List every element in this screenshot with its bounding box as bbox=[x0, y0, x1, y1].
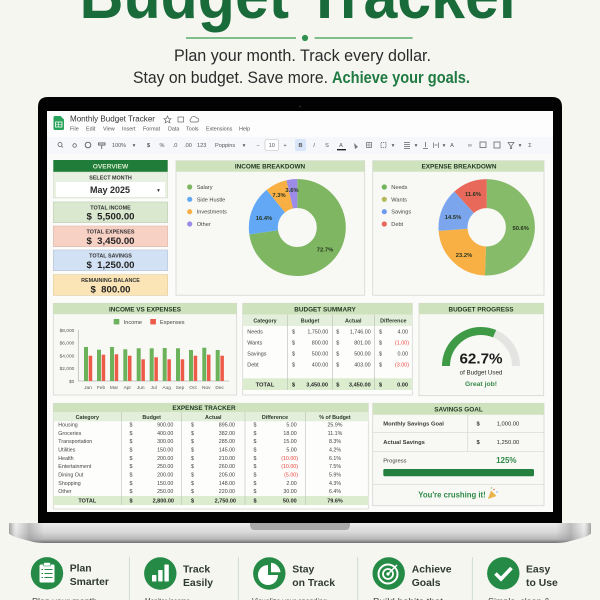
income breakdown heading bbox=[176, 161, 365, 172]
expense tracker rows: $ bbox=[130, 464, 132, 470]
expense tracker rows: $ bbox=[254, 464, 256, 470]
budget summary total row: $ bbox=[379, 382, 383, 388]
expense donut chart bbox=[445, 192, 529, 261]
expense tracker column headers: Difference bbox=[262, 415, 288, 421]
feature heading bbox=[70, 564, 109, 588]
laptop bezel bbox=[38, 97, 562, 523]
income legend: Other bbox=[197, 222, 211, 228]
income legend: Side Hustle bbox=[197, 197, 225, 203]
budget summary rows: Wants bbox=[247, 340, 263, 346]
menu bar: Edit bbox=[86, 126, 96, 132]
budget summary rows: $ bbox=[336, 329, 339, 335]
spreadsheet header bbox=[47, 111, 553, 137]
toolbar: Poppins bbox=[215, 143, 235, 149]
budget summary rows: $ bbox=[336, 351, 339, 357]
expense tracker rows: 145.00 bbox=[219, 448, 235, 454]
expense breakdown heading bbox=[373, 161, 544, 172]
bar chart bbox=[60, 328, 229, 391]
toolbar: Σ bbox=[528, 143, 532, 149]
budget summary rows: 500.00 bbox=[354, 351, 371, 357]
savings goal heading: SAVINGS GOAL bbox=[434, 406, 483, 414]
expense tracker rows: $ bbox=[130, 481, 132, 487]
budget summary rows: $ bbox=[336, 340, 339, 346]
expense donut chart: 14.5% bbox=[445, 215, 461, 221]
expense tracker rows: Groceries bbox=[58, 431, 82, 437]
budget summary rows: $ bbox=[379, 340, 382, 346]
panel: expense tracker bbox=[53, 403, 368, 509]
icon: target bbox=[372, 557, 405, 590]
icon: clipboard bbox=[31, 557, 63, 590]
budget summary column headers: Budget bbox=[301, 318, 319, 324]
budget summary rows: 0.00 bbox=[398, 351, 408, 357]
chart legend bbox=[114, 319, 185, 326]
expense tracker total row: 79.6% bbox=[327, 499, 343, 505]
expense tracker rows: Housing bbox=[58, 423, 78, 429]
laptop bbox=[9, 97, 591, 543]
expense tracker rows: 7.5% bbox=[329, 464, 341, 470]
toolbar: + bbox=[283, 143, 287, 149]
expense tracker rows: $ bbox=[130, 456, 132, 462]
toolbar: B bbox=[298, 143, 303, 149]
income vs expenses heading bbox=[53, 303, 237, 314]
icon: bar chart bbox=[144, 557, 176, 590]
toolbar bbox=[47, 137, 553, 154]
expense tracker rows: 4.2% bbox=[329, 448, 341, 454]
expense tracker rows: (10.00) bbox=[281, 464, 298, 470]
expense tracker rows: $ bbox=[191, 431, 194, 437]
budget summary rows: 1,750.00 bbox=[307, 329, 328, 335]
budget summary rows: (1.00) bbox=[395, 340, 409, 346]
budget summary column headers: Difference bbox=[380, 318, 406, 324]
expense tracker rows: 900.00 bbox=[157, 423, 173, 429]
expense tracker rows: $ bbox=[130, 489, 132, 495]
tagline: Plan your month. Track every dollar. bbox=[174, 46, 431, 65]
expense tracker rows: $ bbox=[254, 448, 256, 454]
budget summary rows: 800.00 bbox=[312, 340, 328, 346]
feature heading: Stay bbox=[292, 565, 314, 576]
expense tracker rows: 5.00 bbox=[286, 423, 297, 429]
budget summary heading bbox=[243, 303, 412, 315]
gauge value: 62.7% bbox=[459, 350, 503, 368]
budget summary rows: 403.00 bbox=[354, 362, 371, 368]
expense tracker rows: Dining Out bbox=[58, 473, 84, 479]
expense tracker column headers: Budget bbox=[142, 415, 161, 421]
feature heading bbox=[183, 565, 213, 589]
monthly savings goal row: 1,000.00 bbox=[497, 422, 519, 428]
budget summary rows: 4.00 bbox=[398, 329, 408, 335]
kpi: total expenses: TOTAL EXPENSES bbox=[87, 230, 135, 236]
overview heading: OVERVIEW bbox=[93, 164, 129, 170]
budget summary rows: Debt bbox=[247, 362, 259, 368]
icon: sheets logo bbox=[54, 116, 64, 130]
menu bar: Format bbox=[143, 126, 161, 132]
expense tracker column headers: Actual bbox=[205, 415, 222, 421]
laptop base bbox=[9, 523, 591, 543]
toolbar: A bbox=[339, 143, 343, 149]
bar chart: $0 bbox=[69, 379, 75, 385]
expense tracker total row: $ bbox=[191, 499, 194, 505]
budget summary rows: $ bbox=[379, 362, 382, 368]
monthly savings goal row: $ bbox=[476, 422, 480, 428]
toolbar: A bbox=[450, 143, 454, 149]
expense tracker rows: $ bbox=[130, 431, 132, 437]
income legend: Salary bbox=[197, 185, 213, 191]
actual savings row bbox=[383, 440, 519, 446]
toolbar: .00 bbox=[184, 143, 192, 149]
expense tracker rows: 30.00 bbox=[283, 489, 297, 495]
panel: income breakdown bbox=[176, 161, 365, 295]
expense tracker rows: 210.00 bbox=[219, 456, 235, 462]
expense tracker rows: 150.00 bbox=[157, 481, 173, 487]
feature heading: Smarter bbox=[70, 577, 109, 588]
expense tracker rows: $ bbox=[254, 489, 256, 495]
expense tracker rows: 285.00 bbox=[219, 439, 235, 445]
bar chart: Mar bbox=[110, 385, 119, 391]
expense tracker heading: EXPENSE TRACKER bbox=[172, 405, 236, 412]
toolbar: S bbox=[325, 143, 329, 149]
feature heading: to Use bbox=[526, 578, 558, 589]
expense tracker rows: Utilities bbox=[58, 448, 76, 454]
expense tracker rows: 400.00 bbox=[157, 431, 173, 437]
expense tracker rows: Entertainment bbox=[58, 464, 92, 470]
expense tracker rows: $ bbox=[191, 481, 194, 487]
menu bar: Extensions bbox=[206, 126, 233, 132]
chart legend: Expenses bbox=[160, 320, 185, 326]
toolbar: ▾ bbox=[243, 143, 246, 149]
expense tracker rows: 25.9% bbox=[327, 423, 343, 429]
expense tracker rows: (10.00) bbox=[281, 456, 298, 462]
kpi: total income: $ 5,500.00 bbox=[86, 212, 135, 222]
expense legend: Needs bbox=[391, 185, 408, 191]
feature heading: Achieve bbox=[412, 565, 452, 576]
kpi: total savings: $ 1,250.00 bbox=[86, 260, 135, 271]
expense tracker rows: 260.00 bbox=[219, 464, 235, 470]
menu bar: Tools bbox=[186, 126, 199, 132]
income donut chart: 72.7% bbox=[317, 247, 333, 253]
actual savings row: 1,250.00 bbox=[497, 440, 519, 446]
feature heading: Easy bbox=[526, 565, 550, 576]
savings progress: Progress bbox=[383, 459, 407, 465]
menu bar: View bbox=[103, 126, 115, 132]
bar chart: Dec bbox=[215, 385, 225, 391]
budget summary rows: $ bbox=[292, 329, 295, 335]
expense tracker rows: 205.00 bbox=[219, 473, 235, 479]
budget progress heading: BUDGET PROGRESS bbox=[449, 306, 514, 313]
budget summary rows: 500.00 bbox=[312, 351, 328, 357]
savings progress: 125% bbox=[496, 456, 517, 465]
feature heading bbox=[412, 565, 452, 589]
panel: income vs expenses bbox=[53, 303, 237, 395]
savings progress bbox=[383, 456, 534, 476]
kpi: remaining balance: REMAINING BALANCE bbox=[81, 278, 140, 284]
expense tracker rows: 18.00 bbox=[283, 431, 297, 437]
expense tracker rows: $ bbox=[254, 481, 256, 487]
menu bar bbox=[70, 126, 250, 132]
feature heading bbox=[292, 565, 335, 589]
feature heading: Track bbox=[183, 565, 210, 576]
actual savings row: $ bbox=[476, 440, 480, 446]
toolbar: ∞ bbox=[468, 143, 472, 149]
budget summary rows: Needs bbox=[247, 329, 263, 335]
icon: pie chart bbox=[253, 557, 286, 590]
toolbar: ▾ bbox=[133, 143, 136, 149]
budget summary total row: 3,450.00 bbox=[306, 382, 328, 388]
expense tracker rows: 148.00 bbox=[219, 481, 235, 487]
budget summary rows: 1,746.00 bbox=[350, 329, 371, 335]
expense tracker rows: $ bbox=[191, 423, 194, 429]
expense tracker rows: $ bbox=[254, 431, 256, 437]
expense tracker rows: 15.00 bbox=[283, 439, 297, 445]
toolbar: ▾ bbox=[519, 143, 522, 149]
expense tracker rows: 250.00 bbox=[157, 464, 173, 470]
panel: overview bbox=[53, 160, 168, 296]
expense legend bbox=[382, 184, 411, 228]
bar chart: Feb bbox=[97, 385, 105, 391]
expense tracker rows: 300.00 bbox=[157, 439, 173, 445]
toolbar: .0 bbox=[173, 143, 177, 149]
expense tracker rows: 150.00 bbox=[157, 448, 173, 454]
bar chart: Nov bbox=[202, 385, 211, 391]
expense tracker rows: $ bbox=[191, 439, 194, 445]
expense tracker rows: 6.4% bbox=[329, 489, 341, 495]
budget summary total row: $ bbox=[336, 382, 340, 388]
panel: expense breakdown bbox=[373, 161, 544, 295]
feature: plan smarter bbox=[31, 557, 109, 600]
income vs expenses heading: INCOME VS EXPENSES bbox=[109, 306, 182, 313]
income breakdown heading: INCOME BREAKDOWN bbox=[235, 164, 306, 171]
bar chart: $6,000 bbox=[60, 341, 75, 347]
expense breakdown heading: EXPENSE BREAKDOWN bbox=[422, 164, 497, 171]
toolbar: 100% bbox=[112, 143, 126, 149]
month selector: May 2025 bbox=[90, 185, 130, 195]
budget summary rows: $ bbox=[336, 362, 339, 368]
kpi: remaining balance: $ 800.00 bbox=[90, 284, 131, 296]
expense tracker rows: $ bbox=[191, 464, 194, 470]
expense tracker rows: $ bbox=[254, 456, 256, 462]
expense legend: Debt bbox=[391, 222, 404, 228]
expense tracker total row: $ bbox=[130, 499, 133, 505]
feature: easy to use bbox=[487, 557, 558, 600]
budget summary heading: BUDGET SUMMARY bbox=[294, 306, 357, 314]
menu bar: Insert bbox=[122, 126, 136, 132]
toolbar: ▾ bbox=[392, 143, 395, 149]
expense tracker rows: $ bbox=[254, 473, 256, 479]
expense tracker rows: 5.00 bbox=[286, 448, 297, 454]
income donut chart: 16.4% bbox=[256, 216, 272, 222]
menu bar: Data bbox=[168, 126, 179, 132]
expense tracker rows: 4.3% bbox=[329, 481, 341, 487]
expense tracker rows: $ bbox=[254, 423, 256, 429]
income donut chart: 3.6% bbox=[285, 188, 299, 194]
feature heading: Goals bbox=[412, 578, 441, 589]
expense tracker rows: $ bbox=[130, 423, 132, 429]
actual savings row: Actual Savings bbox=[383, 440, 425, 446]
expense donut chart: 23.2% bbox=[456, 253, 472, 259]
monthly savings goal row bbox=[383, 422, 519, 428]
expense tracker rows: 250.00 bbox=[157, 489, 173, 495]
bar chart: Oct bbox=[189, 385, 197, 391]
bar chart: Sep bbox=[176, 385, 185, 391]
budget summary total row: TOTAL bbox=[256, 382, 275, 388]
budget summary column headers: Category bbox=[253, 318, 277, 324]
expense tracker rows: (5.00) bbox=[284, 473, 298, 479]
budget summary rows: $ bbox=[292, 340, 295, 346]
laptop camera bbox=[299, 105, 301, 108]
expense tracker rows: 11.1% bbox=[328, 431, 343, 437]
toolbar: ▾ bbox=[443, 143, 446, 149]
panel: budget summary bbox=[243, 303, 412, 395]
expense donut chart: 11.6% bbox=[465, 192, 481, 198]
kpi: total expenses bbox=[53, 226, 168, 247]
gauge bbox=[446, 331, 516, 366]
expense tracker rows: Shopping bbox=[58, 481, 81, 487]
expense tracker rows: $ bbox=[191, 489, 194, 495]
expense tracker rows bbox=[58, 423, 343, 495]
expense tracker rows: Other bbox=[58, 489, 72, 495]
feature heading: Plan bbox=[70, 564, 92, 574]
expense tracker rows: 5.9% bbox=[329, 473, 341, 479]
budget summary column headers: Actual bbox=[345, 318, 362, 324]
budget summary total row bbox=[243, 378, 412, 390]
toolbar: 10 bbox=[269, 143, 275, 149]
expense tracker rows: $ bbox=[254, 439, 256, 445]
expense tracker column headers: % of Budget bbox=[319, 415, 351, 421]
feature: track easily bbox=[144, 557, 213, 600]
savings goal heading bbox=[373, 403, 544, 415]
budget summary rows: $ bbox=[292, 362, 295, 368]
expense tracker rows: 200.00 bbox=[157, 456, 173, 462]
toolbar: % bbox=[160, 143, 165, 149]
tagline: Stay on budget. Save more. bbox=[133, 68, 328, 87]
income donut chart bbox=[256, 188, 333, 262]
expense tracker rows: $ bbox=[191, 448, 194, 454]
expense tracker rows: 220.00 bbox=[219, 489, 235, 495]
expense tracker heading bbox=[53, 403, 368, 412]
month selector: SELECT MONTH bbox=[89, 176, 132, 182]
budget summary column headers bbox=[243, 315, 412, 326]
budget summary total row: 3,450.00 bbox=[349, 382, 371, 388]
income legend bbox=[187, 184, 227, 228]
expense tracker rows: 8.3% bbox=[329, 439, 341, 445]
budget summary rows: (3.00) bbox=[395, 362, 409, 368]
expense tracker rows: 895.00 bbox=[219, 423, 235, 429]
expense tracker rows: $ bbox=[130, 439, 132, 445]
budget summary rows: $ bbox=[292, 351, 295, 357]
kpi: total expenses: $ 3,450.00 bbox=[86, 236, 135, 247]
budget summary rows: 801.00 bbox=[354, 340, 371, 346]
toolbar: 123 bbox=[197, 143, 206, 149]
feature heading bbox=[526, 565, 558, 589]
bar chart: Jan bbox=[84, 385, 92, 391]
feature heading: on Track bbox=[292, 578, 335, 589]
gauge caption: of Budget Used bbox=[460, 370, 503, 377]
panel: budget progress bbox=[419, 303, 544, 396]
income legend: Investments bbox=[197, 210, 227, 216]
menu bar: File bbox=[70, 126, 79, 132]
bar chart: Jun bbox=[137, 385, 145, 391]
expense tracker total row: $ bbox=[254, 499, 257, 505]
bar chart: $8,000 bbox=[60, 328, 75, 334]
kpi: total savings bbox=[53, 250, 168, 271]
budget summary total row: 0.00 bbox=[397, 382, 408, 388]
chart legend: Income bbox=[124, 320, 142, 326]
expense tracker rows: $ bbox=[130, 448, 132, 454]
kpi: total income: TOTAL INCOME bbox=[90, 206, 131, 212]
tagline bbox=[133, 46, 470, 87]
kpi: remaining balance bbox=[53, 275, 168, 296]
expense tracker total row: 2,750.00 bbox=[215, 499, 236, 505]
panel: savings goal bbox=[373, 403, 544, 506]
bar chart: Jul bbox=[151, 385, 157, 391]
menu bar: Help bbox=[239, 126, 250, 132]
income donut chart: 7.3% bbox=[272, 193, 286, 199]
tagline: Achieve your goals. bbox=[332, 68, 470, 87]
title divider bbox=[186, 35, 413, 41]
expense tracker rows: $ bbox=[130, 473, 132, 479]
feature: achieve goals bbox=[372, 557, 452, 600]
budget summary rows: 400.00 bbox=[312, 362, 328, 368]
bar chart: $4,000 bbox=[60, 354, 75, 360]
monthly savings goal row: Monthly Savings Goal bbox=[383, 422, 444, 428]
gauge message: Great job! bbox=[465, 381, 497, 388]
feature: stay on track bbox=[252, 557, 335, 600]
expense tracker total row: TOTAL bbox=[78, 499, 97, 505]
expense tracker rows: Health bbox=[58, 456, 74, 462]
expense tracker total row: 2,800.00 bbox=[153, 499, 174, 505]
expense tracker rows: Transportation bbox=[58, 439, 92, 445]
laptop screen bbox=[47, 111, 553, 512]
icon: check mark bbox=[487, 557, 520, 590]
bar chart: Aug bbox=[162, 385, 171, 391]
bar chart: Apr bbox=[124, 385, 131, 391]
expense tracker total row bbox=[53, 496, 368, 505]
kpi: total savings: TOTAL SAVINGS bbox=[89, 254, 132, 260]
expense legend: Savings bbox=[391, 210, 411, 216]
expense tracker rows: 2.00 bbox=[286, 481, 297, 487]
budget summary rows: Savings bbox=[247, 351, 267, 357]
toolbar: ▾ bbox=[415, 143, 418, 149]
bar chart: $2,000 bbox=[60, 366, 75, 372]
expense tracker rows: 6.1% bbox=[329, 456, 341, 462]
feature heading: Easily bbox=[183, 578, 213, 589]
budget summary rows: $ bbox=[379, 329, 382, 335]
budget summary rows: $ bbox=[379, 351, 382, 357]
title icons bbox=[164, 116, 199, 134]
budget summary rows bbox=[247, 329, 409, 368]
expense tracker column headers: Category bbox=[76, 415, 99, 421]
expense tracker rows: $ bbox=[191, 456, 194, 462]
kpi: total income bbox=[53, 202, 168, 223]
toolbar: $ bbox=[147, 143, 151, 149]
savings message: You're crushing it! bbox=[418, 491, 486, 500]
expense tracker rows: 382.00 bbox=[219, 431, 235, 437]
expense legend: Wants bbox=[391, 197, 407, 203]
icon: party popper bbox=[488, 487, 498, 499]
toolbar: − bbox=[256, 143, 260, 149]
month selector: ▾ bbox=[157, 188, 160, 194]
expense donut chart: 50.6% bbox=[512, 226, 529, 232]
month selector bbox=[53, 172, 168, 198]
expense tracker column headers bbox=[53, 412, 368, 421]
document title: Monthly Budget Tracker bbox=[70, 114, 155, 124]
toolbar: I bbox=[313, 143, 315, 149]
expense tracker rows: 200.00 bbox=[157, 473, 173, 479]
budget summary total row: $ bbox=[292, 382, 296, 388]
expense tracker rows: $ bbox=[191, 473, 194, 479]
expense tracker total row: 50.00 bbox=[283, 499, 297, 505]
